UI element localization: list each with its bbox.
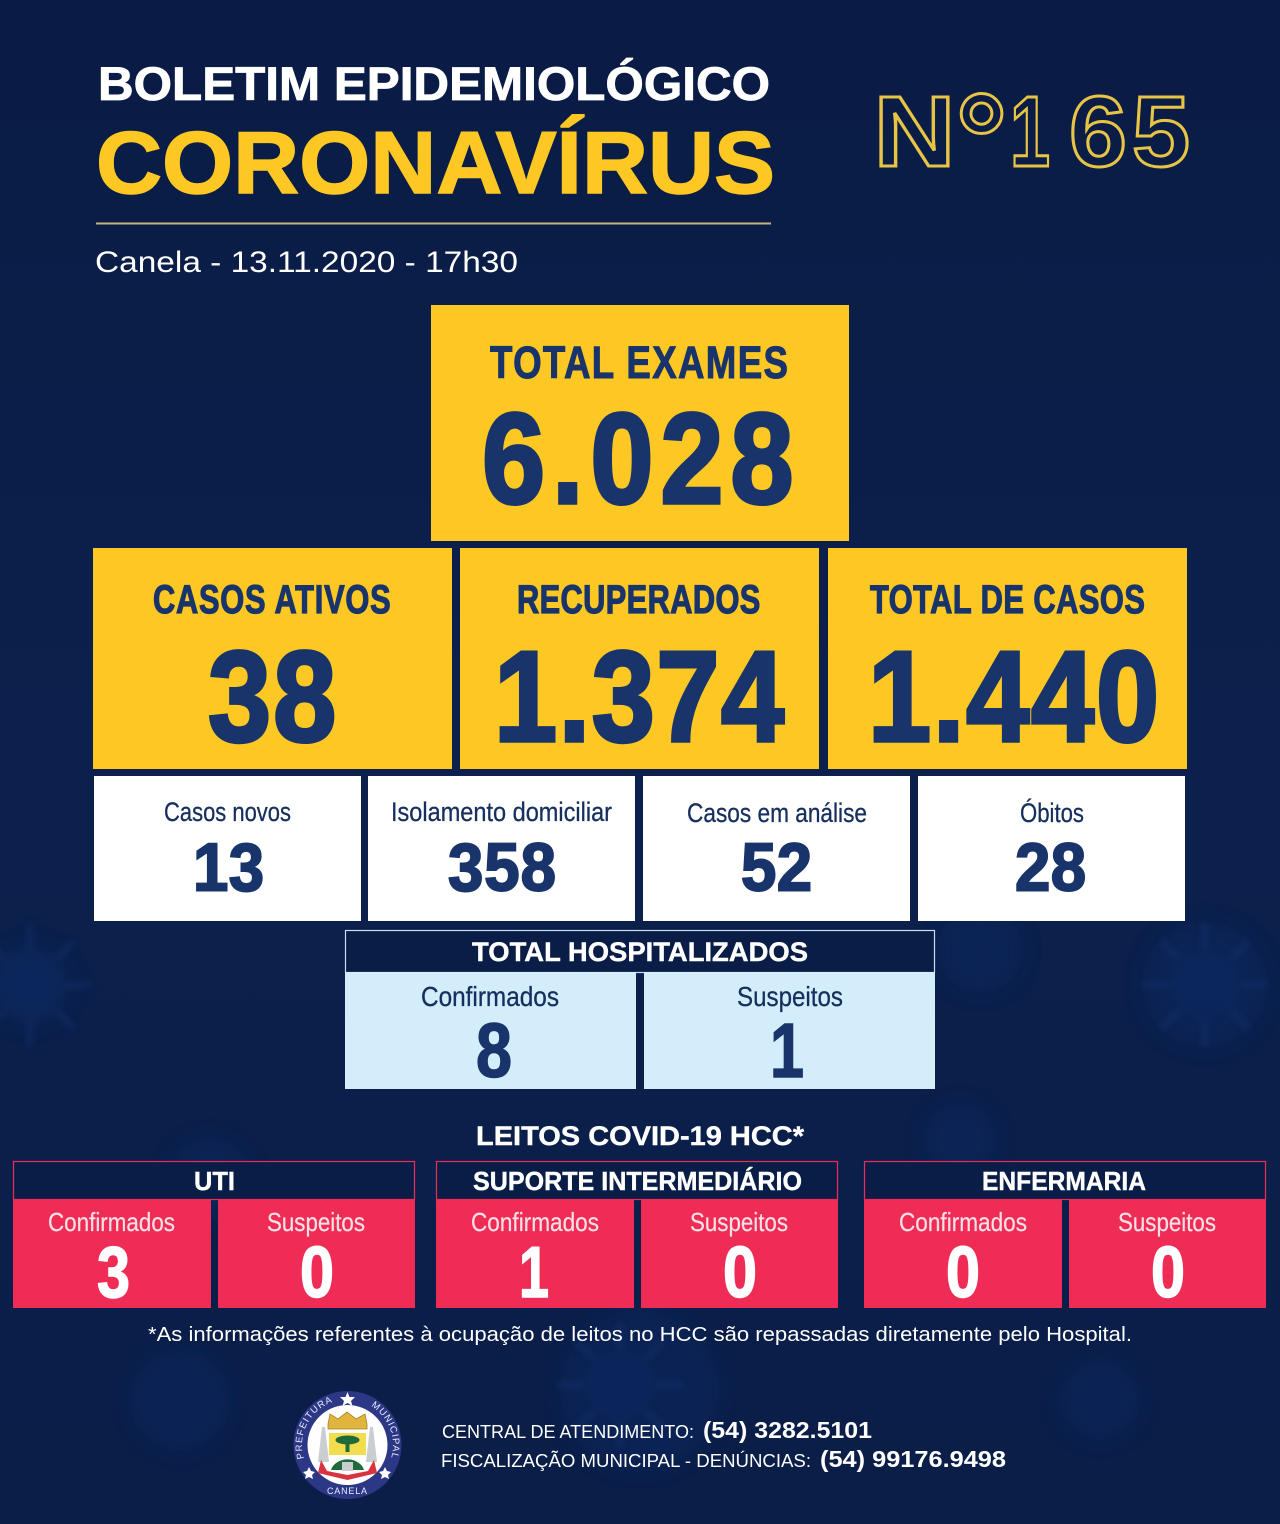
cell: suporte suspeitos (641, 1200, 838, 1313)
cell: enfermaria confirmados (864, 1200, 1062, 1313)
cell: uti confirmados (13, 1200, 211, 1313)
label: casos novos: Casos novos (164, 797, 291, 827)
heading: enfermaria: ENFERMARIA (982, 1166, 1146, 1196)
cell: uti suspeitos (218, 1200, 415, 1313)
cell: suspeitos: 1 (770, 1008, 804, 1094)
panel: recuperados (460, 548, 819, 769)
heading: uti: UTI (194, 1166, 235, 1196)
cell: suporte suspeitos: Suspeitos (690, 1207, 788, 1237)
panel: uti (13, 1162, 415, 1313)
cell: uti confirmados: 3 (97, 1233, 130, 1313)
label: recuperados: RECUPERADOS (517, 577, 760, 622)
bulletin number (874, 66, 1190, 212)
footnote: *As informações referentes à ocupação de leitos no HCC são repassadas diretamente pelo Hospital. (148, 1323, 1132, 1346)
panel: suporte intermediário (436, 1162, 838, 1313)
title: boletim epidemiológico: BOLETIM EPIDEMIOLÓGICO (98, 57, 770, 110)
value: casos ativos: 38 (208, 624, 336, 769)
cell: suporte suspeitos: 0 (723, 1233, 757, 1313)
bulletin number: ° (956, 66, 1008, 212)
cell: uti suspeitos: Suspeitos (267, 1207, 365, 1237)
header rule (96, 222, 771, 224)
panel: total hospitalizados (345, 930, 935, 1094)
cell: confirmados: 8 (476, 1008, 512, 1094)
cell: enfermaria suspeitos: 0 (1151, 1233, 1185, 1313)
panel: casos ativos (93, 548, 452, 769)
bulletin number: N (874, 76, 956, 188)
icon: municipal coat of arms: PREFEITURA (296, 1397, 332, 1460)
contact line: central de atendimento: CENTRAL DE ATENDIMENTO: (442, 1421, 694, 1442)
cell: confirmados: Confirmados (421, 981, 559, 1012)
icon: municipal coat of arms: MUNICIPAL (372, 1401, 400, 1458)
cell: uti confirmados: Confirmados (48, 1207, 175, 1237)
date and place: Canela - 13.11.2020 - 17h30 (95, 246, 518, 279)
label: casos em análise: Casos em análise (687, 798, 867, 828)
heading: total hospitalizados: TOTAL HOSPITALIZADOS (472, 937, 808, 967)
cell: suspeitos: Suspeitos (737, 981, 843, 1012)
value: isolamento domiciliar: 358 (448, 829, 556, 905)
header title block (95, 57, 775, 279)
cell: suspeitos (644, 972, 935, 1094)
value: recuperados: 1.374 (494, 624, 784, 769)
cell: uti suspeitos: 0 (300, 1233, 334, 1313)
cell: enfermaria suspeitos (1069, 1200, 1266, 1313)
label: total de casos: TOTAL DE CASOS (870, 577, 1145, 622)
panel: casos novos (94, 776, 361, 921)
icon: municipal coat of arms: CANELA (327, 1486, 368, 1496)
contact line: fiscalização: FISCALIZAÇÃO MUNICIPAL - DENÚNCIAS: (441, 1450, 811, 1471)
panel: casos em análise (643, 776, 910, 921)
label: casos ativos: CASOS ATIVOS (153, 577, 391, 622)
bulletin number: 6 (1069, 76, 1127, 188)
value: óbitos: 28 (1015, 829, 1086, 905)
contact info (441, 1417, 1006, 1472)
panel: total de casos (828, 548, 1187, 769)
heading: suporte intermediário: SUPORTE INTERMEDIÁRIO (473, 1166, 802, 1196)
cell: suporte confirmados (436, 1200, 634, 1313)
cell: suporte confirmados: Confirmados (471, 1207, 599, 1237)
bulletin number: 1 (1010, 76, 1050, 188)
panel: óbitos (918, 776, 1185, 921)
cell: suporte confirmados: 1 (519, 1233, 549, 1313)
value: total exames: 6.028 (482, 386, 794, 531)
panel: isolamento domiciliar (368, 776, 635, 921)
panel: total exames (431, 305, 849, 541)
contact phone: central: (54) 3282.5101 (703, 1417, 872, 1443)
cell: enfermaria suspeitos: Suspeitos (1118, 1207, 1216, 1237)
icon: municipal coat of arms (294, 1391, 402, 1499)
value: total de casos: 1.440 (868, 624, 1159, 769)
cell: enfermaria confirmados: 0 (946, 1233, 980, 1313)
heading: leitos covid-19 hcc: LEITOS COVID-19 HCC* (476, 1121, 805, 1151)
value: casos em análise: 52 (741, 829, 812, 905)
label: isolamento domiciliar: Isolamento domiciliar (391, 797, 612, 827)
title: coronavírus: CORONAVÍRUS (96, 113, 775, 212)
value: casos novos: 13 (193, 829, 264, 905)
cell: confirmados (345, 972, 636, 1094)
label: total exames: TOTAL EXAMES (490, 337, 788, 388)
panel: enfermaria (864, 1162, 1266, 1313)
label: óbitos: Óbitos (1020, 797, 1084, 828)
bulletin number: 5 (1132, 76, 1190, 188)
contact phone: fiscalização: (54) 99176.9498 (820, 1446, 1006, 1472)
cell: enfermaria confirmados: Confirmados (899, 1207, 1027, 1237)
